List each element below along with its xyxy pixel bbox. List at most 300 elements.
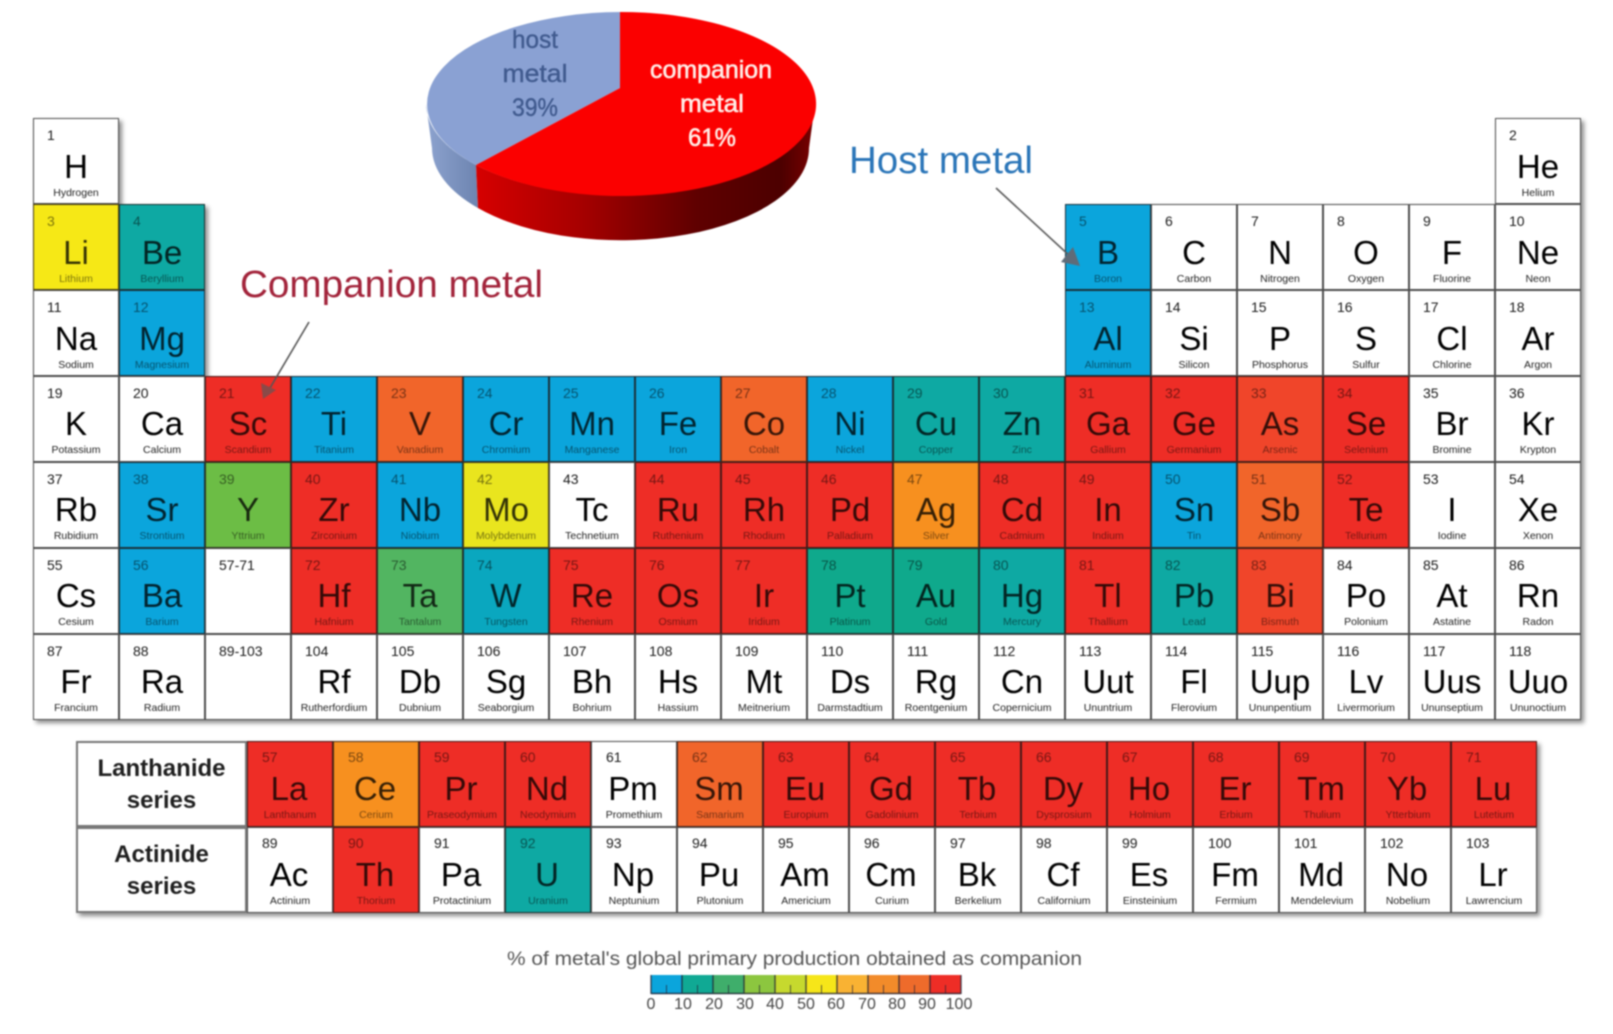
element V — [377, 376, 463, 462]
element C — [1151, 204, 1237, 290]
element Cd: Cd — [1001, 491, 1043, 528]
element Br — [1409, 376, 1495, 462]
element Pr: Praseodymium — [427, 809, 497, 821]
element Be: Be — [142, 234, 182, 271]
pie label: companion metal: companion — [650, 56, 772, 84]
arrow: Companion metal to scandium — [261, 322, 309, 399]
element Sc: 21 — [219, 385, 235, 401]
element Cu: Copper — [919, 444, 953, 456]
pie label: companion metal: metal — [680, 90, 744, 118]
element Ir — [721, 548, 807, 634]
element I — [1409, 462, 1495, 548]
element Yb: Yb — [1387, 770, 1427, 807]
element C: Carbon — [1177, 273, 1211, 285]
element Tc: Technetium — [565, 530, 619, 542]
element Cu: Cu — [915, 405, 957, 442]
element Pm: Pm — [608, 770, 658, 807]
element Mn: 25 — [563, 385, 579, 401]
element W: 74 — [477, 557, 493, 573]
element Be — [119, 204, 205, 290]
element Se: Se — [1346, 405, 1386, 442]
element O — [1323, 204, 1409, 290]
element Fm — [1193, 827, 1279, 913]
element Lr: Lawrencium — [1466, 895, 1522, 907]
element Md — [1279, 827, 1365, 913]
element Uuo: Uuo — [1508, 663, 1568, 700]
element Ta — [377, 548, 463, 634]
actinide placeholder 89-103: 89-103 — [219, 643, 263, 659]
element B: B — [1097, 234, 1119, 271]
element Re: 75 — [563, 557, 579, 573]
legend scale labels: 10 — [674, 996, 692, 1013]
element Er — [1193, 741, 1279, 827]
element Bh: 107 — [563, 643, 586, 659]
pie label: host metal: 39% — [512, 94, 558, 122]
element Mn: Manganese — [565, 444, 619, 456]
lanthanide placeholder 57-71 — [205, 548, 291, 634]
element U: Uranium — [528, 895, 568, 907]
element Pr: 59 — [434, 749, 450, 765]
element Tm: 69 — [1294, 749, 1310, 765]
element Sn: Sn — [1174, 491, 1214, 528]
element Dy: Dy — [1043, 770, 1083, 807]
element Tl: Thallium — [1088, 616, 1128, 628]
element Lu: Lu — [1475, 770, 1511, 807]
element Md: Md — [1298, 856, 1344, 893]
element H: H — [64, 148, 88, 185]
element Cd: Cadmium — [1000, 530, 1044, 542]
element Te — [1323, 462, 1409, 548]
element Hg: Mercury — [1003, 616, 1041, 628]
element Sn: Tin — [1187, 530, 1201, 542]
element Mt: Meitnerium — [738, 702, 790, 714]
element Ni: 28 — [821, 385, 837, 401]
element Al — [1065, 290, 1151, 376]
element Bh: Bohrium — [572, 702, 612, 714]
element Ni: Nickel — [836, 444, 864, 456]
element Ge — [1151, 376, 1237, 462]
element Fe — [635, 376, 721, 462]
element Fe: 26 — [649, 385, 665, 401]
element As — [1237, 376, 1323, 462]
element Rb: Rubidium — [54, 530, 98, 542]
element Ge: Germanium — [1167, 444, 1221, 456]
element Mt — [721, 634, 807, 720]
element Lr — [1451, 827, 1537, 913]
element Ac: Ac — [270, 856, 308, 893]
element Lv — [1323, 634, 1409, 720]
element Gd: 64 — [864, 749, 880, 765]
element Er: Erbium — [1219, 809, 1253, 821]
element Pm — [591, 741, 677, 827]
legend scale labels: 20 — [705, 996, 723, 1013]
element Rf: Rf — [318, 663, 350, 700]
element Db: Dubnium — [399, 702, 441, 714]
element Es — [1107, 827, 1193, 913]
row label: Actinide series: Actinide — [114, 841, 209, 868]
element Y: 39 — [219, 471, 235, 487]
element Gd: Gadolinium — [865, 809, 919, 821]
element Hs: 108 — [649, 643, 672, 659]
element Ag — [893, 462, 979, 548]
element Db: 105 — [391, 643, 414, 659]
element Db — [377, 634, 463, 720]
element Yb — [1365, 741, 1451, 827]
element Bi: 83 — [1251, 557, 1267, 573]
element Rb: Rb — [55, 491, 97, 528]
element Bi — [1237, 548, 1323, 634]
element Sr: 38 — [133, 471, 149, 487]
element Pd: Pd — [830, 491, 870, 528]
legend scale labels: 100 — [946, 996, 972, 1013]
element Co: Co — [743, 405, 785, 442]
element Xe — [1495, 462, 1581, 548]
element Na: Sodium — [58, 359, 94, 371]
element K: 19 — [47, 385, 63, 401]
pie wall: companion slice side — [476, 104, 815, 240]
element Am: 95 — [778, 835, 794, 851]
element S: 16 — [1337, 299, 1353, 315]
element Hg — [979, 548, 1065, 634]
element Se: 34 — [1337, 385, 1353, 401]
element Rh: 45 — [735, 471, 751, 487]
element Pb: Pb — [1174, 577, 1214, 614]
legend scale labels: 0 — [647, 996, 656, 1013]
element Kr: Krypton — [1520, 444, 1556, 456]
element S: S — [1355, 320, 1377, 357]
element Sc — [205, 376, 291, 462]
element Uuo — [1495, 634, 1581, 720]
element Sm: Sm — [694, 770, 744, 807]
element Os: 76 — [649, 557, 665, 573]
element Cn: Cn — [1001, 663, 1043, 700]
element Ar — [1495, 290, 1581, 376]
element F — [1409, 204, 1495, 290]
element Db: Db — [399, 663, 441, 700]
element No: No — [1386, 856, 1428, 893]
element U: 92 — [520, 835, 536, 851]
element Ra: Ra — [141, 663, 183, 700]
element Yb: 70 — [1380, 749, 1396, 765]
heading: Companion metal: Companion metal — [240, 264, 543, 306]
element Md: 101 — [1294, 835, 1317, 851]
element Uus: Ununseptium — [1421, 702, 1483, 714]
element He: He — [1517, 148, 1559, 185]
element Hf: 72 — [305, 557, 321, 573]
element Ba: Ba — [142, 577, 182, 614]
lanthanide placeholder 57-71: 57-71 — [219, 557, 255, 573]
element P: 15 — [1251, 299, 1267, 315]
element Na: 11 — [47, 299, 62, 315]
element Pt: 78 — [821, 557, 837, 573]
element Uuo: Ununoctium — [1510, 702, 1566, 714]
element Ag: Silver — [923, 530, 949, 542]
element H: Hydrogen — [53, 187, 99, 199]
element Rn — [1495, 548, 1581, 634]
element K — [33, 376, 119, 462]
element Tm — [1279, 741, 1365, 827]
element S — [1323, 290, 1409, 376]
element Gd: Gd — [869, 770, 913, 807]
element Ga — [1065, 376, 1151, 462]
element Nb: Nb — [399, 491, 441, 528]
element Cm — [849, 827, 935, 913]
element Ir: Ir — [754, 577, 774, 614]
element Ba — [119, 548, 205, 634]
element Cf: Cf — [1046, 856, 1080, 893]
legend scale labels: 30 — [736, 996, 754, 1013]
element Cf: 98 — [1036, 835, 1052, 851]
element Th: 90 — [348, 835, 364, 851]
element Np: 93 — [606, 835, 622, 851]
element He: Helium — [1522, 187, 1554, 199]
element Cl: Cl — [1436, 320, 1468, 357]
element Yb: Ytterbium — [1386, 809, 1430, 821]
element Zn: Zinc — [1012, 444, 1032, 456]
element Pt: Platinum — [830, 616, 870, 628]
element Tm: Thulium — [1303, 809, 1341, 821]
element Rb: 37 — [47, 471, 63, 487]
element Cl: 17 — [1423, 299, 1439, 315]
element Cs — [33, 548, 119, 634]
element Tb: Tb — [958, 770, 996, 807]
element Po: Polonium — [1344, 616, 1388, 628]
element Tb: 65 — [950, 749, 966, 765]
element La: Lanthanum — [264, 809, 316, 821]
element P: Phosphorus — [1252, 359, 1308, 371]
element Er: Er — [1218, 770, 1252, 807]
element Fl: Fl — [1180, 663, 1208, 700]
element Co — [721, 376, 807, 462]
element V: V — [409, 405, 431, 442]
element Ce: Cerium — [359, 809, 393, 821]
element Be: Beryllium — [140, 273, 184, 285]
element Xe: 54 — [1509, 471, 1525, 487]
element Sc: Sc — [229, 405, 267, 442]
element Ar: Argon — [1524, 359, 1552, 371]
element Fl: 114 — [1165, 643, 1187, 659]
element Md: Mendelevium — [1291, 895, 1353, 907]
element Uup: 115 — [1251, 643, 1273, 659]
element Ti: 22 — [305, 385, 321, 401]
element Sm: 62 — [692, 749, 708, 765]
element H: 1 — [47, 127, 55, 143]
element Os — [635, 548, 721, 634]
element Np: Np — [612, 856, 654, 893]
element Cn: Copernicium — [993, 702, 1051, 714]
element Ta: 73 — [391, 557, 407, 573]
element Te: Te — [1349, 491, 1383, 528]
row label: Actinide series: series — [127, 873, 196, 900]
element Cn — [979, 634, 1065, 720]
element K: Potassium — [51, 444, 101, 456]
heading: Host metal: Host metal — [849, 140, 1033, 182]
element Eu: Europium — [784, 809, 828, 821]
element Pb: 82 — [1165, 557, 1181, 573]
element W: W — [490, 577, 522, 614]
element Al: Al — [1093, 320, 1123, 357]
element Mg — [119, 290, 205, 376]
element Pd: Palladium — [827, 530, 873, 542]
element Es: 99 — [1122, 835, 1138, 851]
element La — [247, 741, 333, 827]
element Uup: Ununpentium — [1249, 702, 1311, 714]
element As: Arsenic — [1262, 444, 1298, 456]
element Br: 35 — [1423, 385, 1439, 401]
element Ce: 58 — [348, 749, 364, 765]
element F: F — [1442, 234, 1462, 271]
element Au — [893, 548, 979, 634]
element Cs: Cesium — [58, 616, 94, 628]
legend scale labels — [647, 996, 972, 1013]
element Rn: Radon — [1523, 616, 1553, 628]
element Mn: Mn — [569, 405, 615, 442]
element Pu: Pu — [699, 856, 739, 893]
element Zr — [291, 462, 377, 548]
element Lv: 116 — [1337, 643, 1359, 659]
pie label: host metal — [502, 26, 568, 122]
element Te: 52 — [1337, 471, 1353, 487]
element Ba: Barium — [145, 616, 179, 628]
element Po — [1323, 548, 1409, 634]
element Mo: 42 — [477, 471, 493, 487]
element Uup — [1237, 634, 1323, 720]
element Uus: Uus — [1423, 663, 1481, 700]
element Hs — [635, 634, 721, 720]
element Pa — [419, 827, 505, 913]
element Lr: Lr — [1478, 856, 1508, 893]
element O: Oxygen — [1348, 273, 1384, 285]
element Rf — [291, 634, 377, 720]
element Zn: Zn — [1003, 405, 1041, 442]
element Zr: 40 — [305, 471, 321, 487]
element Li — [33, 204, 119, 290]
element Nd: Nd — [526, 770, 568, 807]
element F: 9 — [1423, 213, 1431, 229]
legend scale labels: 60 — [827, 996, 845, 1013]
element Th: Thorium — [357, 895, 395, 907]
element Pb: Lead — [1182, 616, 1206, 628]
element O: O — [1353, 234, 1379, 271]
element Cf: Californium — [1037, 895, 1091, 907]
element Ho: Holmium — [1129, 809, 1171, 821]
element Cm: 96 — [864, 835, 880, 851]
element Al: 13 — [1079, 299, 1095, 315]
element Cm: Curium — [875, 895, 909, 907]
element Ra: 88 — [133, 643, 149, 659]
element Mg: Mg — [139, 320, 185, 357]
element Po: Po — [1346, 577, 1386, 614]
element Pu: Plutonium — [697, 895, 743, 907]
element Ni — [807, 376, 893, 462]
element Cr — [463, 376, 549, 462]
element Re: Re — [571, 577, 613, 614]
pie slice: host metal 39% — [427, 12, 620, 165]
element Pu: 94 — [692, 835, 708, 851]
element Cr: Chromium — [482, 444, 530, 456]
element Hs: Hassium — [658, 702, 698, 714]
element Fm: 100 — [1208, 835, 1231, 851]
element Rg — [893, 634, 979, 720]
element Hf: Hafnium — [314, 616, 354, 628]
element Fe: Fe — [659, 405, 697, 442]
element Ac: Actinium — [270, 895, 310, 907]
element Cl — [1409, 290, 1495, 376]
element Cr: Cr — [489, 405, 523, 442]
element Au: Gold — [925, 616, 947, 628]
element Li: Li — [63, 234, 89, 271]
element Tc: Tc — [576, 491, 608, 528]
element Es: Einsteinium — [1123, 895, 1177, 907]
element Uup: Uup — [1250, 663, 1310, 700]
element Pa: Pa — [441, 856, 481, 893]
element Tb: Terbium — [959, 809, 997, 821]
element Np: Neptunium — [609, 895, 659, 907]
element Sb: 51 — [1251, 471, 1267, 487]
element Rn: 86 — [1509, 557, 1525, 573]
element Hg: Hg — [1001, 577, 1043, 614]
element Se — [1323, 376, 1409, 462]
element Am: Americium — [781, 895, 831, 907]
element Fr: Fr — [60, 663, 92, 700]
element Lr: 103 — [1466, 835, 1489, 851]
element Pd: 46 — [821, 471, 837, 487]
actinide placeholder 89-103 — [205, 634, 291, 720]
element Nd: 60 — [520, 749, 536, 765]
element Bk: 97 — [950, 835, 966, 851]
element Lu: 71 — [1466, 749, 1482, 765]
element Gd — [849, 741, 935, 827]
element P — [1237, 290, 1323, 376]
element Pt: Pt — [834, 577, 866, 614]
element Y: Y — [237, 491, 259, 528]
element Ti — [291, 376, 377, 462]
element P: P — [1269, 320, 1291, 357]
element V: Vanadium — [397, 444, 443, 456]
element La: La — [271, 770, 307, 807]
element U: U — [535, 856, 559, 893]
element Rf: 104 — [305, 643, 328, 659]
element Ti: Titanium — [314, 444, 354, 456]
element Nd: Neodymium — [520, 809, 576, 821]
row label: Lanthanide series — [76, 741, 247, 827]
element Sm: Samarium — [696, 809, 744, 821]
element Pb — [1151, 548, 1237, 634]
element Al: Aluminum — [1085, 359, 1131, 371]
element Y: Yttrium — [231, 530, 265, 542]
element Mg: Magnesium — [135, 359, 189, 371]
element Nb: Niobium — [401, 530, 439, 542]
element Pm: Promethium — [606, 809, 662, 821]
row label: Lanthanide series: Lanthanide — [97, 755, 226, 782]
element Hs: Hs — [658, 663, 698, 700]
element Kr: Kr — [1522, 405, 1554, 442]
element Rh: Rhodium — [743, 530, 785, 542]
element Tl — [1065, 548, 1151, 634]
element Ac: 89 — [262, 835, 278, 851]
element Sc: Scandium — [225, 444, 271, 456]
element Ds: Darmstadtium — [817, 702, 883, 714]
legend scale labels: 80 — [888, 996, 906, 1013]
element Cu: 29 — [907, 385, 923, 401]
element Fr: 87 — [47, 643, 63, 659]
element Rg: 111 — [907, 643, 928, 659]
element Nb: 41 — [391, 471, 407, 487]
element Ta: Tantalum — [399, 616, 441, 628]
element Tb — [935, 741, 1021, 827]
element Rf: Rutherfordium — [301, 702, 367, 714]
element Si: Silicon — [1179, 359, 1209, 371]
